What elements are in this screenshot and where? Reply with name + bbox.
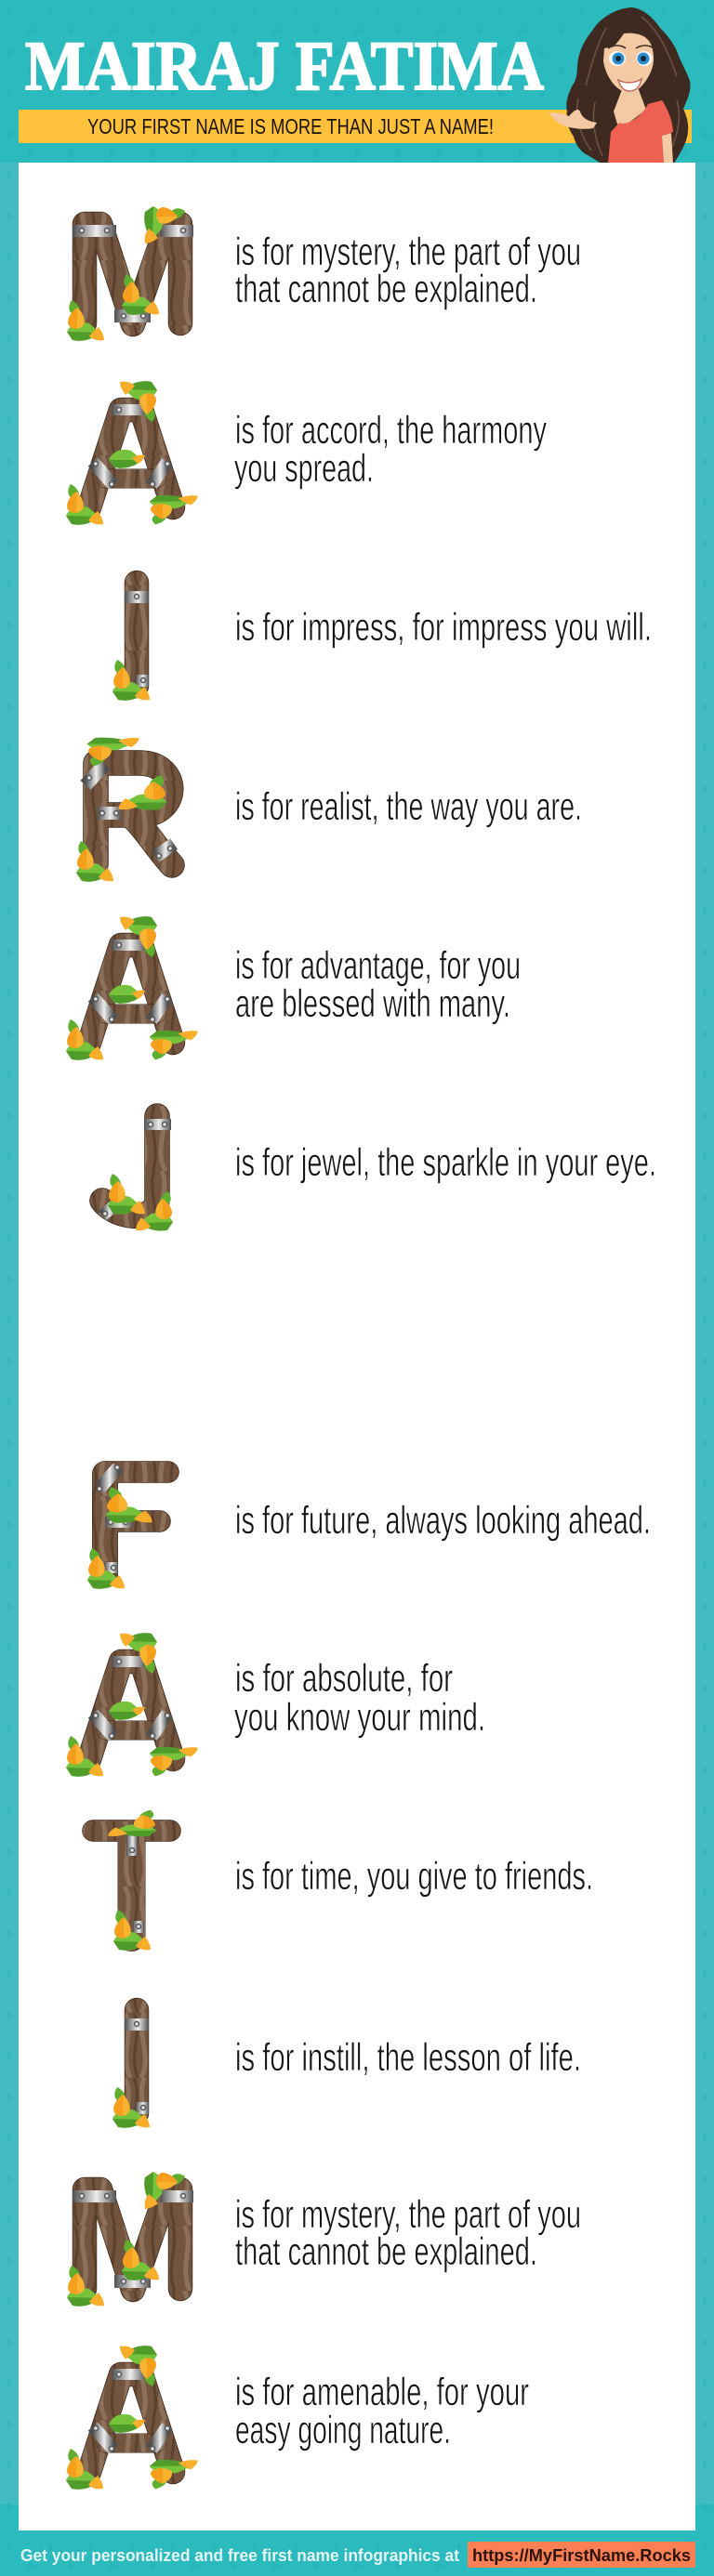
letter A [66,2346,198,2490]
text: A advantage: is for advantage, for you [235,943,521,987]
footer: Get your personalized and free first name infographics at [20,2546,459,2565]
text: A accord: is for accord, the harmony [235,408,547,452]
text: A accord: you spread. [234,446,374,490]
letter F [87,1465,168,1589]
text: A amenable: easy going nature. [235,2408,451,2451]
letter A [66,916,198,1060]
footer [20,2542,695,2568]
footer: https://MyFirstName.Rocks [472,2546,691,2565]
letter J [102,1116,173,1230]
text: A advantage [235,943,521,1025]
text: M mystery: that cannot be explained. [235,267,537,310]
text: A advantage: are blessed with many. [235,981,510,1025]
letter A [66,1633,198,1777]
yellow tagline banner [19,110,692,143]
letter A [66,381,198,525]
text: A accord [234,408,547,490]
letter M [67,206,193,341]
icon: cartoon woman presenting [549,7,691,164]
text: A amenable [235,2370,529,2451]
yellow tagline banner: YOUR FIRST NAME IS MORE THAN JUST A NAME! [87,114,494,138]
text: A absolute [234,1656,485,1739]
letter T [93,1810,170,1951]
letter I [112,2010,150,2128]
text: A amenable: is for amenable, for your [235,2370,529,2413]
title: MAIRAJ FATIMA [25,28,544,105]
letter I [112,583,150,701]
text: A absolute: you know your mind. [234,1695,485,1739]
letter R [76,738,174,882]
text: M mystery [235,230,581,310]
text: M mystery: that cannot be explained. [235,2229,537,2273]
text: M mystery [235,2192,581,2273]
text: A absolute: is for absolute, for [235,1656,453,1700]
letter M [67,2172,193,2307]
